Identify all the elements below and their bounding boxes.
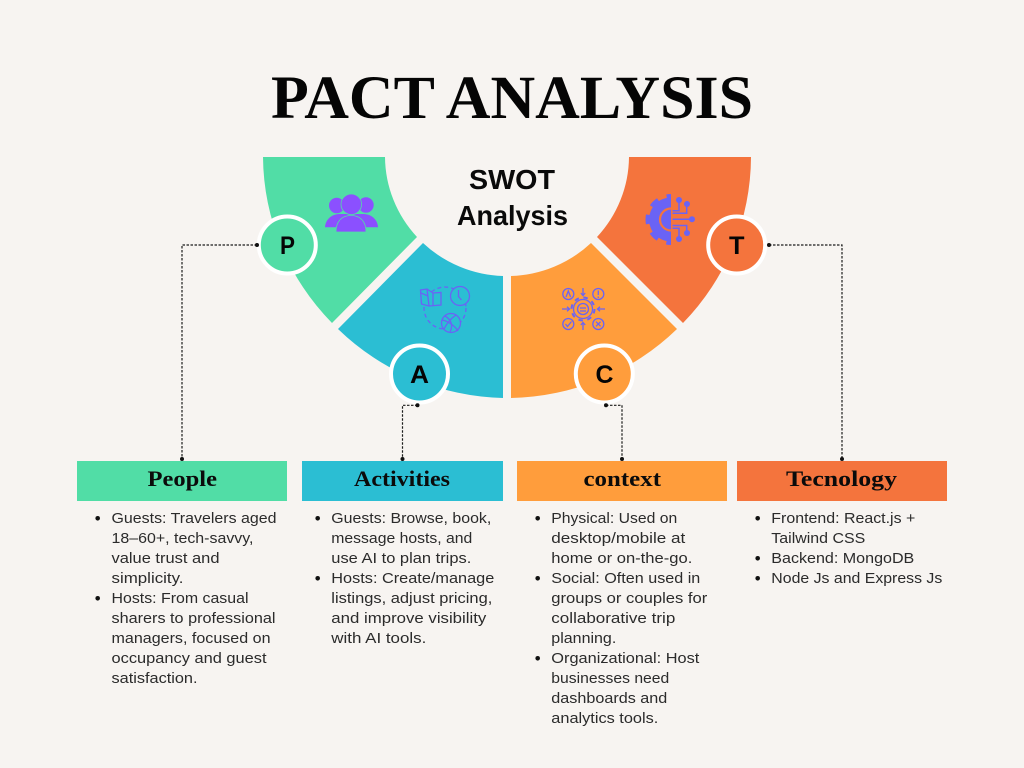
connector: P to People	[180, 243, 259, 461]
panel: Technology segment	[597, 157, 751, 323]
text block: Activities details: listings, adjust pricing,	[331, 591, 492, 607]
header: Tecnology	[737, 461, 947, 501]
text block: Activities details: message hosts, and	[331, 531, 472, 547]
badge: P	[259, 216, 316, 274]
text block: People details: Hosts: From casual	[112, 591, 248, 607]
icon: context gear and arrows	[562, 288, 605, 330]
text block: Context details: Social: Often used in	[551, 571, 700, 587]
text block: Context details: groups or couples for	[551, 591, 708, 607]
text block: Activities details	[315, 511, 494, 647]
text block: Context details: collaborative trip	[551, 611, 675, 627]
icon: technology half gear and circuit	[648, 196, 695, 243]
text block: Context details: desktop/mobile at	[551, 531, 685, 547]
text block: Technology details: Backend: MongoDB	[771, 551, 914, 567]
connector: T to Tecnology	[767, 243, 844, 461]
text block: People details: managers, focused on	[112, 631, 271, 647]
center heading: SWOT Analysis	[457, 164, 568, 231]
header: People: People	[148, 466, 217, 491]
badge: C: C	[596, 361, 614, 389]
text block: Activities details: Hosts: Create/manage	[331, 571, 494, 587]
text block: Technology details: Node Js and Express Js	[771, 571, 942, 587]
text block: Context details	[535, 511, 708, 727]
badge: P: P	[280, 232, 295, 260]
text block: Context details: Physical: Used on	[551, 511, 677, 527]
badge: T	[708, 216, 765, 274]
text block: Context details: Organizational: Host	[551, 651, 699, 667]
text block: Context details: analytics tools.	[551, 711, 658, 727]
text block: Technology details: Tailwind CSS	[771, 531, 865, 547]
panel: People segment	[263, 157, 417, 323]
header: People	[77, 461, 287, 501]
header: context	[517, 461, 727, 501]
text block: Context details: home or on-the-go.	[551, 551, 692, 567]
text block: People details: Guests: Travelers aged	[112, 511, 277, 527]
connector: A to Activities	[400, 403, 420, 461]
text block: People details: 18–60+, tech-savvy,	[112, 531, 254, 547]
badge: A	[391, 346, 448, 402]
header: Activities	[302, 461, 503, 501]
text block: People details: sharers to professional	[112, 611, 276, 627]
badge: T: T	[729, 232, 744, 260]
icon: people group	[325, 194, 378, 232]
header: Tecnology: Tecnology	[786, 466, 897, 491]
badge: A: A	[410, 361, 429, 389]
text block: Activities details: with AI tools.	[330, 631, 426, 647]
icon: activities book, clock and ball	[420, 286, 470, 332]
text block: Activities details: Guests: Browse, book,	[331, 511, 491, 527]
text block: Context details: dashboards and	[551, 691, 667, 707]
panel: Context segment	[511, 243, 677, 398]
text block: People details: satisfaction.	[112, 671, 198, 687]
text block: Activities details: and improve visibility	[331, 611, 487, 627]
text block: Activities details: use AI to plan trips.	[331, 551, 471, 567]
text block: Technology details	[755, 511, 942, 587]
text block: People details: simplicity.	[112, 571, 184, 587]
text block: Context details: planning.	[551, 631, 616, 647]
connector: C to context	[604, 403, 624, 461]
badge: C	[576, 346, 633, 402]
header: context: context	[584, 466, 662, 491]
center heading: SWOT Analysis: SWOT	[469, 164, 555, 195]
text block: People details: occupancy and guest	[112, 651, 267, 667]
panel: Activities segment	[338, 243, 503, 398]
header: Activities: Activities	[354, 466, 450, 491]
text block: Technology details: Frontend: React.js +	[771, 511, 915, 527]
text block: People details	[95, 511, 277, 687]
text block: People details: value trust and	[112, 551, 220, 567]
title: PACT ANALYSIS	[271, 65, 753, 132]
text block: Context details: businesses need	[551, 671, 669, 687]
center heading: SWOT Analysis: Analysis	[457, 200, 568, 231]
